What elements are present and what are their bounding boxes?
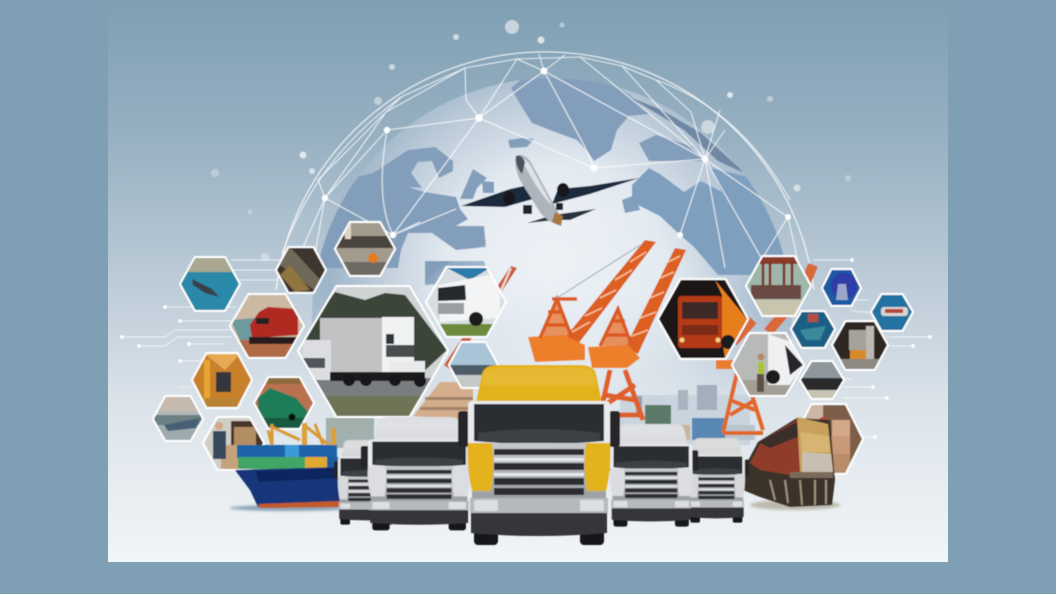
hexagon: small port	[450, 343, 497, 387]
crane: rear right	[716, 265, 813, 433]
background panel	[108, 0, 948, 562]
hexagon: white cab truck	[427, 268, 505, 336]
globe with continents	[312, 78, 792, 392]
hexagon: road aerial	[276, 247, 326, 293]
floating light dots	[211, 20, 851, 261]
truck: right white	[604, 424, 698, 527]
hexagon: container ship blue	[872, 295, 912, 330]
crane: center orange	[588, 248, 686, 420]
hexagon: green van	[255, 378, 313, 428]
cargo ship	[230, 423, 350, 511]
hexagon: red truck	[231, 295, 303, 357]
hexagon: aerial ship	[180, 258, 240, 310]
hexagon: orange truck at night	[659, 280, 747, 358]
truck: left white	[361, 417, 477, 530]
continent: eastern seas	[632, 168, 798, 275]
hexagon: container cranes	[747, 257, 810, 315]
truck: center yellow	[458, 365, 620, 545]
circuit lines left	[120, 260, 290, 415]
airplane	[461, 155, 639, 226]
haze behind port	[400, 230, 740, 450]
network nodes	[322, 68, 791, 238]
continent: Scandinavia	[353, 147, 453, 188]
outer bottom band	[0, 562, 1056, 594]
continent: Greenland	[511, 78, 648, 162]
circuit lines right	[813, 258, 932, 438]
truck: far left white	[334, 440, 399, 525]
hexagon: warehouse	[336, 223, 394, 275]
port skyline and background scene	[326, 382, 755, 448]
continent: southern blob	[425, 261, 490, 285]
truck: far right white	[684, 438, 749, 523]
freight locomotive	[743, 417, 840, 510]
hexagon: ship in harbour	[801, 362, 843, 398]
crane: far left behind hexagon	[444, 266, 517, 370]
continent: arctic islands	[639, 135, 704, 161]
hexagon: port vessel	[154, 397, 202, 440]
hexagon: yellow crane hook	[193, 354, 251, 407]
continent: western landmass	[315, 174, 486, 268]
continent: Iceland	[508, 138, 534, 148]
crane: left orange	[528, 240, 656, 362]
hexagon: forklift	[833, 322, 887, 369]
hexagon: boxes and worker	[204, 418, 264, 469]
hexagon: blue globe	[823, 270, 860, 305]
hexagon: cartons behind train	[795, 405, 862, 473]
hexagon: large white box truck	[299, 287, 447, 416]
continent: British Isles	[460, 169, 487, 199]
hexagon: worker with truck	[733, 334, 803, 395]
connection network	[276, 52, 814, 290]
continent: small islands	[622, 195, 640, 213]
hexagon: teal ship	[792, 312, 834, 347]
